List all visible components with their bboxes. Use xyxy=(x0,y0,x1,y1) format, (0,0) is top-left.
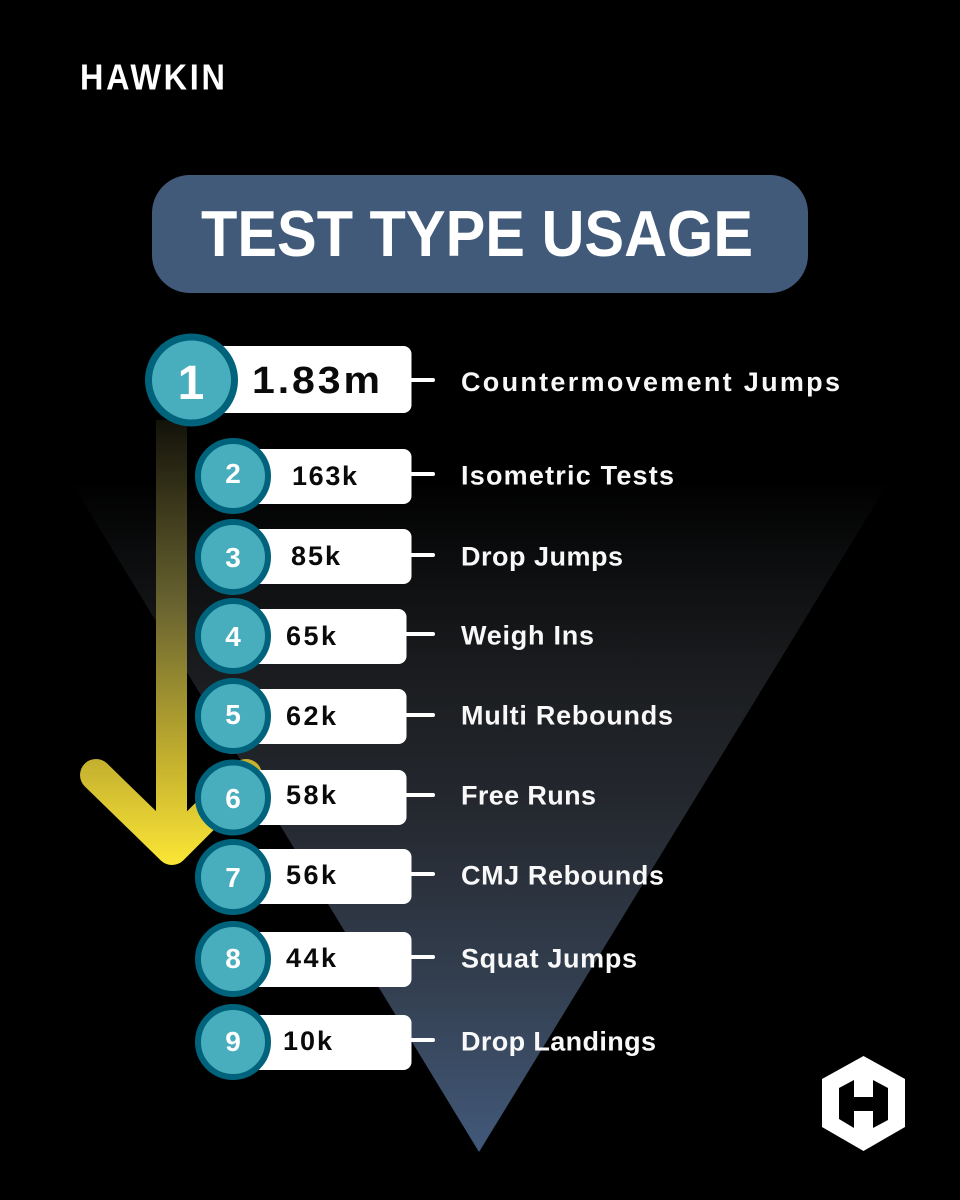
row 9: Drop Landings: 9 xyxy=(225,1026,241,1057)
title banner: TEST TYPE USAGE xyxy=(201,197,753,270)
row 1: Countermovement Jumps: 1 xyxy=(178,357,204,410)
funnel triangle xyxy=(70,480,890,1152)
row 2: Isometric Tests: 2 xyxy=(225,458,241,489)
row 4: Weigh Ins xyxy=(198,601,594,671)
row 6: Free Runs xyxy=(198,762,596,832)
row 2: Isometric Tests xyxy=(198,441,674,511)
row 8: Squat Jumps: 44k xyxy=(286,943,337,973)
row 6: Free Runs: 6 xyxy=(225,783,241,814)
row 7: CMJ Rebounds: CMJ Rebounds xyxy=(461,860,664,890)
row 8: Squat Jumps: 8 xyxy=(225,943,241,974)
row 7: CMJ Rebounds: 56k xyxy=(286,860,337,890)
row 9: Drop Landings xyxy=(198,1007,656,1077)
row 5: Multi Rebounds: 62k xyxy=(286,701,337,731)
row 4: Weigh Ins: 4 xyxy=(225,621,241,652)
row 7: CMJ Rebounds: 7 xyxy=(225,862,241,893)
row 6: Free Runs: Free Runs xyxy=(461,780,596,810)
row 5: Multi Rebounds xyxy=(198,681,673,751)
row 5: Multi Rebounds: 5 xyxy=(225,699,241,730)
row 8: Squat Jumps: Squat Jumps xyxy=(461,944,637,974)
arrow: downward ranking xyxy=(96,420,246,849)
row 3: Drop Jumps: Drop Jumps xyxy=(461,542,623,572)
row 3: Drop Jumps xyxy=(198,522,623,592)
row 1: Countermovement Jumps xyxy=(148,337,840,423)
row 2: Isometric Tests: 163k xyxy=(292,461,358,491)
row 1: Countermovement Jumps: Countermovement Jumps xyxy=(461,367,840,397)
row 1: Countermovement Jumps: 1.83m xyxy=(252,359,380,402)
row 8: Squat Jumps xyxy=(198,924,637,994)
row 5: Multi Rebounds: Multi Rebounds xyxy=(461,700,673,730)
row 3: Drop Jumps: 85k xyxy=(291,541,341,571)
row 2: Isometric Tests: Isometric Tests xyxy=(461,460,674,490)
row 9: Drop Landings: 10k xyxy=(283,1026,333,1056)
row 4: Weigh Ins: Weigh Ins xyxy=(461,620,594,650)
row 4: Weigh Ins: 65k xyxy=(286,621,337,651)
row 3: Drop Jumps: 3 xyxy=(225,542,241,573)
title banner xyxy=(152,175,808,293)
row 7: CMJ Rebounds xyxy=(198,842,664,912)
row 9: Drop Landings: Drop Landings xyxy=(461,1026,656,1056)
icon: hexagon H logo xyxy=(822,1056,905,1151)
row 6: Free Runs: 58k xyxy=(286,780,337,810)
brand wordmark: HAWKIN xyxy=(80,58,225,98)
